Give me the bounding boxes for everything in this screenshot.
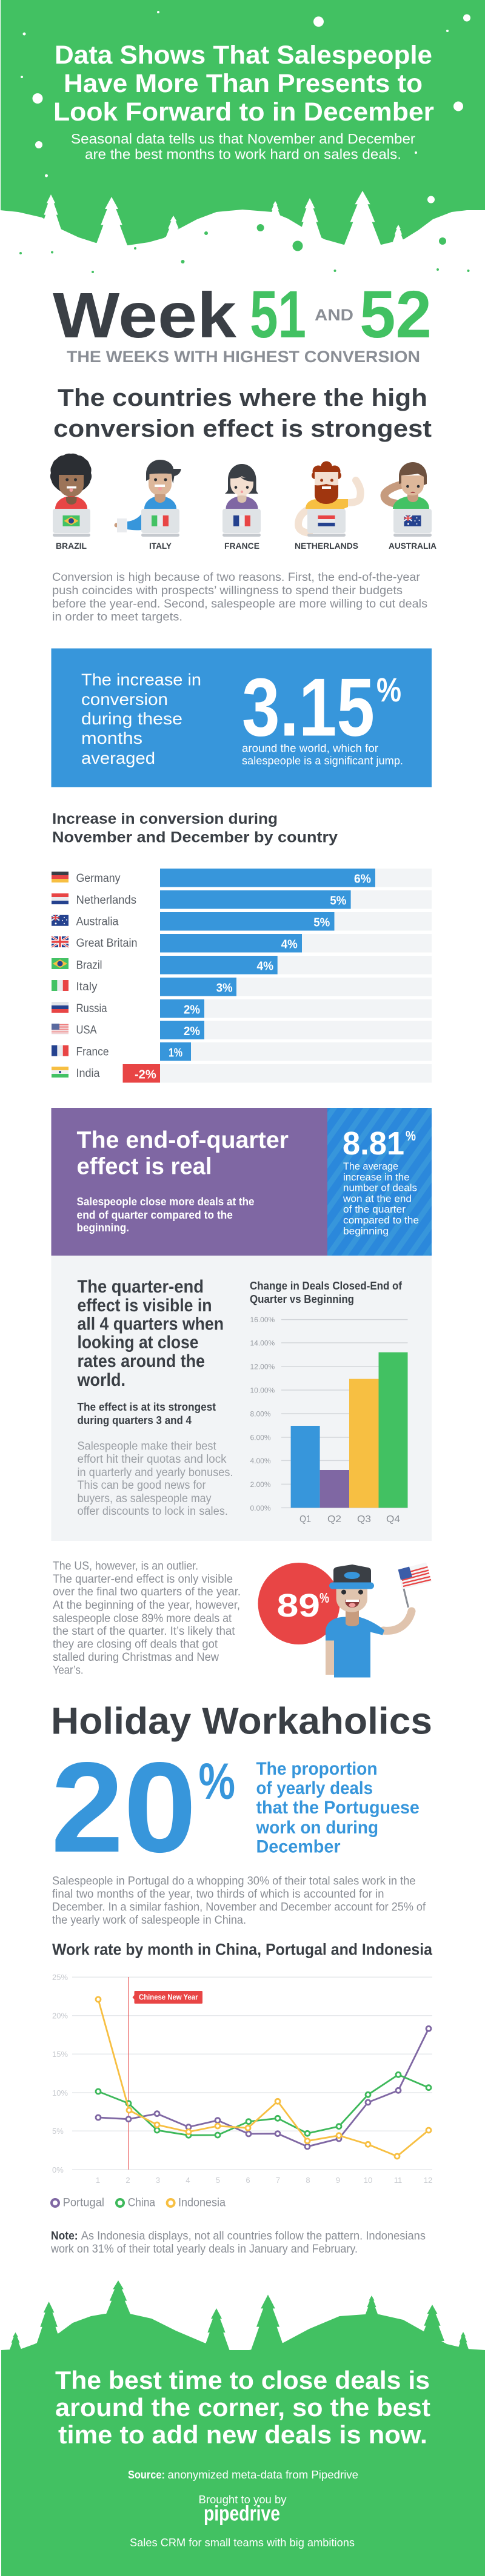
character: Australia: AUSTRALIA	[389, 541, 436, 551]
line chart: work rate by month: 12	[424, 2176, 432, 2185]
row: Australia 5%: 5%	[313, 916, 330, 929]
title: Data Shows That Salespeople	[55, 41, 432, 70]
bar chart: change in deals closed: 12.00%	[250, 1363, 275, 1371]
big number: 3.15%: %	[376, 670, 401, 709]
paragraph: Portugal and China: Salespeople in Portugal do a whopping 30% of their total sales work in the	[52, 1875, 416, 1888]
row: France 1%: 1%	[169, 1045, 182, 1060]
row: Netherlands 5%: 5%	[330, 894, 346, 907]
row: USA 2%: USA	[76, 1024, 97, 1037]
paragraph: salespeople quotas: offer discounts to lock in sales.	[78, 1505, 228, 1518]
paragraph: Portugal and China: final two months of the year, two thirds of which is accounted for in	[52, 1888, 384, 1901]
row: Italy 3%	[52, 978, 432, 996]
note: As Indonesia displays, not all countries follow the pattern. Indonesians	[81, 2230, 426, 2242]
row: Germany 6%: 6%	[354, 872, 371, 886]
headline: Week 51 and 52: Week	[53, 280, 237, 351]
line chart: work rate by month: 8	[306, 2176, 310, 2185]
heading: quarter-end visible: The quarter-end	[78, 1277, 204, 1297]
headline: Week 51 and 52: 52	[360, 277, 432, 352]
character: Australia	[384, 462, 436, 551]
bar chart: change in deals closed: Q3	[357, 1514, 371, 1525]
subheading: strongest in Q3 and Q4: The effect is at its strongest	[78, 1400, 216, 1413]
chart title	[250, 1279, 403, 1305]
series: Indonesia	[96, 1997, 431, 2159]
paragraph: the US is an outlier	[53, 1560, 241, 1677]
heading: quarter-end visible	[77, 1277, 224, 1390]
stat circle: 89%: 89	[277, 1588, 320, 1624]
character: France	[222, 464, 261, 551]
heading: countries: conversion effect is strongest	[53, 416, 432, 442]
text: close more deals	[76, 1196, 255, 1234]
line chart: work rate by month: 20%	[52, 2011, 68, 2021]
subheading: strongest in Q3 and Q4	[78, 1400, 216, 1426]
caption: average increase: compared to the	[343, 1215, 419, 1226]
row: India -2%	[52, 1064, 432, 1083]
legend: Portugal	[63, 2197, 104, 2210]
note: work on 31% of their total yearly deals in January and February.	[50, 2243, 358, 2256]
subtitle	[71, 131, 415, 162]
line chart: work rate by month: 0%	[52, 2165, 64, 2174]
brand credit	[199, 2494, 286, 2526]
text: proportion of yearly deals	[256, 1759, 420, 1857]
series: China	[96, 2072, 431, 2137]
row: France 1%: France	[76, 1045, 109, 1059]
paragraph: the US is an outlier: they are closing off deals that got	[53, 1638, 218, 1651]
panel text: increase in conversion: The increase in	[81, 670, 201, 689]
subtitle: are the best months to work hard on sales deals.	[85, 147, 401, 162]
row: Italy 3%: 3%	[216, 981, 233, 995]
panel text: increase in conversion: during these	[81, 709, 182, 728]
heading: increase by country	[52, 810, 338, 846]
panel: 8.81% stat	[327, 1108, 432, 1256]
row: Great Britain 4%: 4%	[281, 938, 298, 951]
closing message: around the corner, so the best	[55, 2393, 430, 2422]
header banner: green snowy scene	[0, 0, 485, 273]
chart title: Change in Deals Closed-End of	[250, 1279, 403, 1292]
paragraph: Portugal and China: December. In a similar fashion, November and December account for 25% of	[52, 1901, 426, 1914]
paragraph: salespeople quotas: effort hit their quotas and lock	[78, 1453, 227, 1466]
legend: China	[128, 2197, 155, 2210]
paragraph: the US is an outlier: Year’s.	[53, 1664, 84, 1677]
heading: end-of-quarter: effect is real	[76, 1153, 212, 1179]
text: proportion of yearly deals: December	[256, 1836, 341, 1857]
closing message: The best time to close deals is	[55, 2366, 430, 2394]
tooltip: Chinese New Year: Chinese New Year	[139, 1993, 198, 2002]
title: Have More Than Presents to	[64, 69, 423, 98]
text: proportion of yearly deals: of yearly deals	[256, 1778, 373, 1798]
line chart: work rate by month: 10	[364, 2176, 372, 2185]
heading: quarter-end visible: rates around the	[78, 1351, 205, 1371]
row: Brazil 4%: 4%	[257, 959, 273, 973]
character: Brazil	[50, 454, 92, 551]
bar chart: conversion by country	[52, 869, 432, 1083]
bar chart: change in deals closed: Q4	[386, 1514, 400, 1525]
bar chart: change in deals closed: 4.00%	[250, 1457, 271, 1465]
text: proportion of yearly deals: The proportion	[256, 1759, 377, 1779]
character: France: FRANCE	[224, 541, 259, 551]
caption: average increase: number of deals	[343, 1183, 417, 1194]
heading: end-of-quarter	[76, 1127, 289, 1179]
paragraph: the US is an outlier: stalled during Christmas and New	[53, 1651, 219, 1664]
character: Italy: ITALY	[149, 541, 172, 551]
caption: average increase: increase in the	[343, 1172, 410, 1183]
line chart: work rate by month: 6	[246, 2176, 250, 2185]
paragraph: reasons for high conversion	[52, 571, 427, 624]
character: US salesperson with flag	[326, 1563, 432, 1678]
headline: Week 51 and 52: 51	[250, 277, 306, 352]
paragraph: salespeople quotas	[78, 1440, 233, 1518]
paragraph: the US is an outlier: salespeople close 89% more deals at	[53, 1612, 232, 1625]
row: USA 2%: 2%	[184, 1024, 200, 1038]
panel text: increase in conversion: conversion	[81, 690, 168, 709]
character: Brazil: BRAZIL	[56, 541, 87, 551]
row: Germany 6%	[52, 869, 432, 887]
legend	[52, 2197, 226, 2210]
bar chart: change in deals closed: 6.00%	[250, 1433, 271, 1442]
big number: 20%: 20	[51, 1735, 196, 1879]
closing message	[55, 2366, 430, 2449]
bar chart: change in deals closed: 10.00%	[250, 1386, 275, 1394]
note	[50, 2230, 426, 2256]
paragraph: reasons for high conversion: before the year-end. Second, salespeople are more willing to cut deals	[52, 598, 427, 611]
legend: Indonesia	[178, 2197, 226, 2210]
line chart: work rate by month: 7	[276, 2176, 280, 2185]
paragraph: Portugal and China	[52, 1875, 426, 1927]
panel text: increase in conversion: averaged	[81, 749, 155, 767]
paragraph: salespeople quotas: Salespeople make their best	[78, 1440, 216, 1453]
heading: Holiday Workaholics: Holiday Workaholics	[51, 1701, 432, 1742]
series: Portugal	[96, 2026, 431, 2149]
row: Netherlands 5%: Netherlands	[76, 894, 136, 907]
heading: quarter-end visible: world.	[77, 1370, 125, 1390]
bar chart: change in deals closed	[250, 1316, 407, 1525]
headline: Week 51 and 52	[53, 277, 432, 352]
heading: countries	[53, 385, 432, 442]
paragraph: salespeople quotas: buyers, as salespeople may	[78, 1492, 212, 1505]
caption: average increase: The average	[343, 1161, 398, 1172]
line chart: work rate by month: 2	[125, 2176, 130, 2185]
row: Brazil 4%	[52, 956, 432, 974]
row: Russia 2%: Russia	[76, 1002, 107, 1015]
panel: 3.15% increase	[51, 648, 432, 787]
panel text: increase in conversion: months	[81, 729, 142, 747]
caption: around the world: salespeople is a significant jump.	[242, 755, 403, 767]
heading: end-of-quarter: The end-of-quarter	[76, 1127, 289, 1153]
character: Netherlands	[295, 462, 361, 551]
heading: countries: The countries where the high	[58, 385, 427, 411]
heading: increase by country: November and December by country	[52, 829, 338, 846]
heading: quarter-end visible: all 4 quarters when	[78, 1314, 224, 1334]
text: proportion of yearly deals: work on during	[256, 1818, 378, 1838]
line chart: work rate by month: 4	[186, 2176, 190, 2185]
big number: 8.81%: 8.81	[343, 1125, 404, 1162]
heading: work rate chart: Work rate by month in China, Portugal and Indonesia	[52, 1941, 433, 1959]
logo: pipedrive: pipedrive	[204, 2502, 280, 2526]
heading: quarter-end visible: effect is visible in	[78, 1296, 212, 1316]
big number: 20%: %	[199, 1753, 235, 1810]
paragraph: reasons for high conversion: in order to meet targets.	[52, 611, 182, 624]
paragraph: Portugal and China: the yearly work of salespeople in China.	[52, 1914, 246, 1927]
tagline: Sales CRM for small teams with big ambitions	[130, 2537, 355, 2549]
row: Russia 2%	[52, 999, 432, 1018]
row: Italy 3%: Italy	[76, 981, 98, 993]
caption: average increase: beginning	[343, 1226, 389, 1237]
line chart: work rate by month: 3	[156, 2176, 160, 2185]
text: proportion of yearly deals: that the Portuguese	[256, 1798, 420, 1818]
caption: average increase: won at the end	[343, 1193, 412, 1204]
character: Netherlands: NETHERLANDS	[295, 541, 358, 551]
row: USA 2%	[52, 1021, 432, 1039]
bar chart: change in deals closed: Q1	[299, 1514, 311, 1525]
panel: quarter-end effect details	[51, 1256, 432, 1541]
closing message: time to add new deals is now.	[58, 2420, 427, 2449]
title	[53, 41, 434, 127]
heading: increase by country: Increase in conversion during	[52, 810, 278, 827]
bar chart: change in deals closed: 16.00%	[250, 1316, 275, 1324]
source: anonymized meta-data from Pipedrive	[167, 2469, 358, 2481]
row: France 1%	[52, 1042, 432, 1061]
panel: end-of-quarter effect	[51, 1108, 327, 1256]
paragraph: reasons for high conversion: push coincides with prospects’ willingness to spend their budgets	[52, 584, 403, 597]
line chart: work rate by month: 9	[336, 2176, 340, 2185]
bar chart: change in deals closed: 2.00%	[250, 1480, 271, 1489]
bar chart: change in deals closed: 14.00%	[250, 1339, 275, 1347]
bar chart: change in deals closed: 0.00%	[250, 1504, 271, 1512]
row: Netherlands 5%	[52, 890, 432, 909]
caption: average increase: of the quarter	[343, 1204, 406, 1215]
source: Source:	[128, 2469, 165, 2481]
sub-headline: THE WEEKS WITH HIGHEST CONVERSION	[67, 348, 420, 366]
title: Look Forward to in December	[53, 98, 434, 127]
row: India -2%: India	[76, 1067, 100, 1080]
paragraph: the US is an outlier: over the final two quarters of the year.	[53, 1586, 241, 1598]
heading: quarter-end visible: looking at close	[78, 1333, 199, 1353]
tooltip: Chinese New Year	[132, 1991, 202, 2004]
line chart: work rate by month: 25%	[52, 1973, 68, 1982]
note: Note:	[51, 2230, 78, 2242]
row: Great Britain 4%	[52, 934, 432, 952]
panel text: increase in conversion	[81, 670, 201, 767]
stat circle: 89%: %	[319, 1590, 329, 1606]
row: Great Britain 4%: Great Britain	[76, 937, 137, 950]
row: India -2%: -2%	[135, 1067, 156, 1082]
row: Australia 5%	[52, 912, 432, 930]
paragraph: the US is an outlier: the start of the quarter. It’s likely that	[53, 1625, 235, 1638]
big number: 3.15%: 3.15	[242, 661, 375, 753]
line chart: work rate by month	[52, 1973, 432, 2185]
paragraph: the US is an outlier: At the beginning of the year, however,	[53, 1599, 240, 1612]
row: Australia 5%: Australia	[76, 916, 119, 928]
subtitle: Seasonal data tells us that November and December	[71, 131, 415, 147]
brand credit: Brought to you by	[199, 2494, 286, 2506]
line chart: work rate by month: 15%	[52, 2050, 68, 2059]
text: close more deals: Salespeople close more deals at the	[76, 1196, 255, 1208]
text: close more deals: beginning.	[76, 1222, 129, 1234]
footer banner: green hills and trees	[1, 2280, 485, 2576]
stat circle: 89%	[258, 1563, 340, 1644]
big number: 8.81%: %	[406, 1128, 416, 1144]
paragraph: the US is an outlier: The US, however, is an outlier.	[53, 1560, 198, 1572]
line chart: work rate by month: 5%	[52, 2127, 64, 2136]
paragraph: reasons for high conversion: Conversion is high because of two reasons. First, the end-of-the-year	[52, 571, 421, 584]
row: Germany 6%: Germany	[76, 872, 121, 885]
subheading: strongest in Q3 and Q4: during quarters 3 and 4	[78, 1414, 192, 1426]
bar chart: change in deals closed: Q2	[327, 1514, 341, 1525]
chart title: Quarter vs Beginning	[250, 1293, 354, 1305]
line chart: work rate by month: 1	[96, 2176, 100, 2185]
paragraph: the US is an outlier: The quarter-end effect is only visible	[53, 1573, 233, 1586]
row: Russia 2%: 2%	[184, 1003, 200, 1016]
caption: around the world	[242, 743, 403, 767]
bar chart: change in deals closed: 8.00%	[250, 1410, 271, 1419]
character: Italy	[114, 460, 181, 551]
paragraph: salespeople quotas: in quarterly and yearly bonuses.	[78, 1466, 233, 1479]
row: Brazil 4%: Brazil	[76, 959, 102, 972]
caption: average increase	[343, 1161, 419, 1237]
line chart: work rate by month: 10%	[52, 2088, 68, 2098]
headline: Week 51 and 52: AND	[315, 306, 353, 324]
text: close more deals: end of quarter compared to the	[76, 1209, 233, 1221]
paragraph: salespeople quotas: This can be good news for	[78, 1479, 206, 1492]
caption: around the world: around the world, which for	[242, 743, 378, 755]
line chart: work rate by month: 5	[216, 2176, 220, 2185]
line chart: work rate by month: 11	[394, 2176, 402, 2185]
